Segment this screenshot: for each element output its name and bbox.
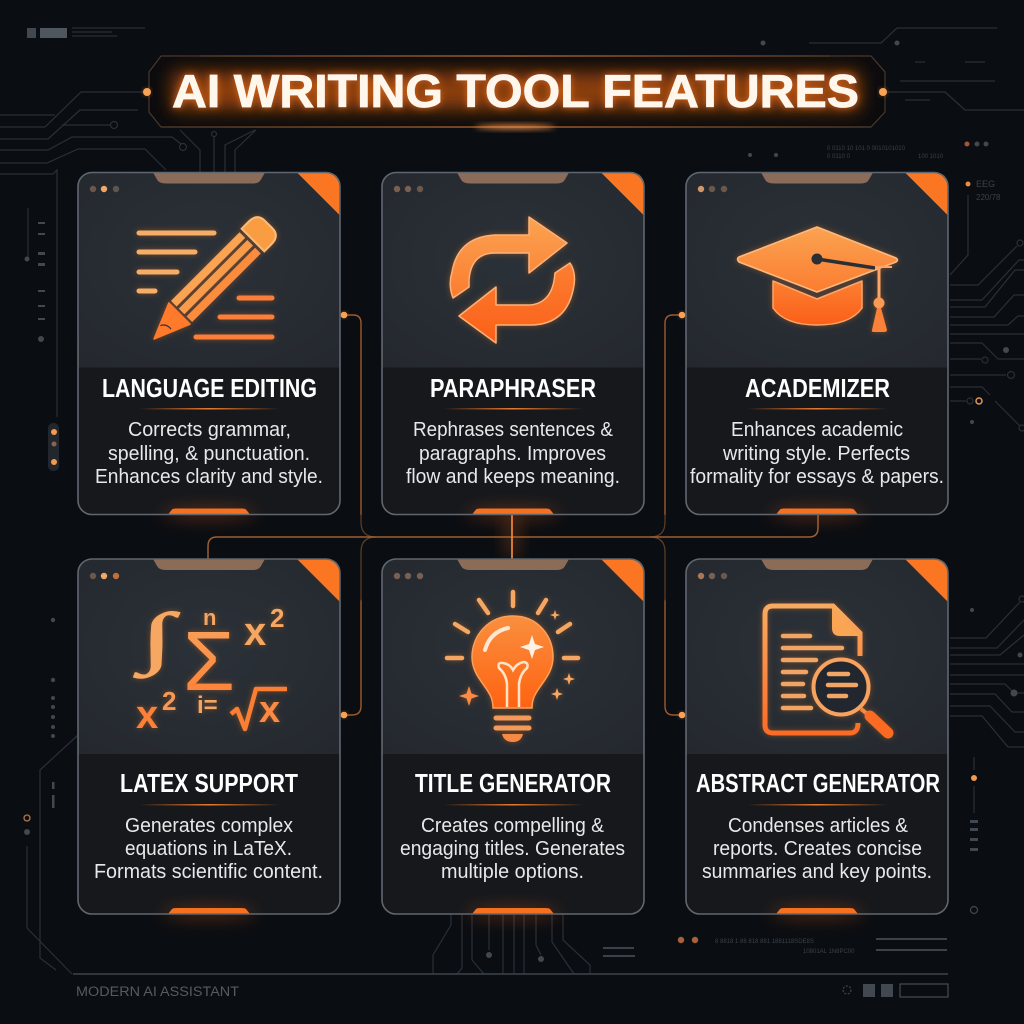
divider (747, 408, 888, 410)
card frame (78, 172, 340, 520)
title text: AI WRITING TOOL FEATURES (172, 65, 859, 117)
description: summaries and key points. (702, 861, 932, 883)
background tiny readouts: 100 1010 (918, 154, 944, 160)
background tiny readouts: 10801AL 1N8PC00 (803, 949, 855, 955)
panel: academizer (686, 172, 948, 520)
description: Condenses articles & (728, 815, 909, 837)
left node (143, 88, 151, 96)
title plaque (143, 56, 887, 129)
panel: title generator (382, 559, 644, 920)
background tiny readouts: EEG (976, 179, 995, 189)
description: flow and keeps meaning. (406, 466, 620, 488)
description (406, 419, 620, 488)
card frame (382, 559, 644, 920)
description (95, 419, 323, 488)
heading: TITLE GENERATOR (415, 768, 611, 798)
description: Creates compelling & (421, 815, 605, 837)
background tiny readouts: 0 0110 0 (827, 154, 851, 160)
heading: PARAPHRASER (430, 373, 596, 403)
divider (139, 804, 280, 806)
description: Enhances clarity and style. (95, 466, 323, 488)
background status lights (24, 142, 982, 943)
footer label: MODERN AI ASSISTANT (76, 984, 239, 999)
background tiny readouts: 8 8818 1 88 818 881 1881118SDE8S (715, 939, 814, 945)
background tiny readouts: 220/78 (976, 193, 1001, 202)
plaque bottom highlight (475, 125, 555, 129)
plaque accent lines (161, 56, 871, 127)
right node (879, 88, 887, 96)
description: Corrects grammar, (128, 419, 291, 441)
description (702, 815, 932, 883)
icon: graduation cap (738, 227, 898, 332)
heading: ACADEMIZER (745, 373, 890, 403)
icon: math formulas: x (259, 689, 280, 731)
heading: ABSTRACT GENERATOR (696, 768, 940, 798)
description: paragraphs. Improves (419, 443, 606, 465)
icon: document with magnifier (765, 606, 888, 733)
description: Rephrases sentences & (413, 419, 614, 441)
plaque frame (149, 56, 885, 127)
icon: math formulas: Σ (183, 614, 235, 708)
description: multiple options. (441, 861, 584, 883)
description (94, 815, 323, 883)
plaque glow (172, 72, 860, 110)
description (690, 419, 944, 488)
description: reports. Creates concise (713, 838, 922, 860)
panel: latex support (78, 559, 340, 920)
icon: math formulas: 2 (270, 603, 284, 633)
description: Generates complex (125, 815, 293, 837)
panel: abstract generator (686, 559, 948, 920)
description: Enhances academic (731, 419, 903, 441)
description: spelling, & punctuation. (108, 443, 310, 465)
card frame (78, 559, 340, 920)
panel: language editing (78, 172, 340, 520)
description: Formats scientific content. (94, 861, 323, 883)
icon: math formulas: x (136, 693, 158, 737)
card frame (382, 172, 644, 520)
icon: math formulas: 2 (162, 686, 176, 716)
description: formality for essays & papers. (690, 466, 944, 488)
heading: LANGUAGE EDITING (102, 373, 317, 403)
description: equations in LaTeX. (125, 838, 292, 860)
divider (443, 408, 584, 410)
description: writing style. Perfects (722, 443, 910, 465)
card frame (686, 559, 948, 920)
icon: math formulas: x (244, 610, 266, 654)
icon: pencil and text lines (139, 213, 280, 350)
divider (139, 408, 280, 410)
icon: math formulas: i= (197, 692, 218, 719)
card frame (686, 172, 948, 520)
heading: LATEX SUPPORT (120, 768, 298, 798)
icon: light bulb (447, 592, 578, 742)
connector lines (208, 312, 818, 718)
panel: paraphraser (382, 172, 644, 520)
description: engaging titles. Generates (400, 838, 625, 860)
icon: math formulas (133, 600, 287, 737)
background tiny readouts (715, 146, 1001, 955)
divider (747, 804, 888, 806)
icon: math formulas: n (203, 605, 216, 630)
background tiny readouts: 0 0110 10 101 0 0010101010 (827, 146, 906, 152)
icon: refresh arrows (450, 217, 574, 343)
icon: math formulas: ∫ (133, 600, 181, 679)
divider (443, 804, 584, 806)
description (400, 815, 625, 883)
